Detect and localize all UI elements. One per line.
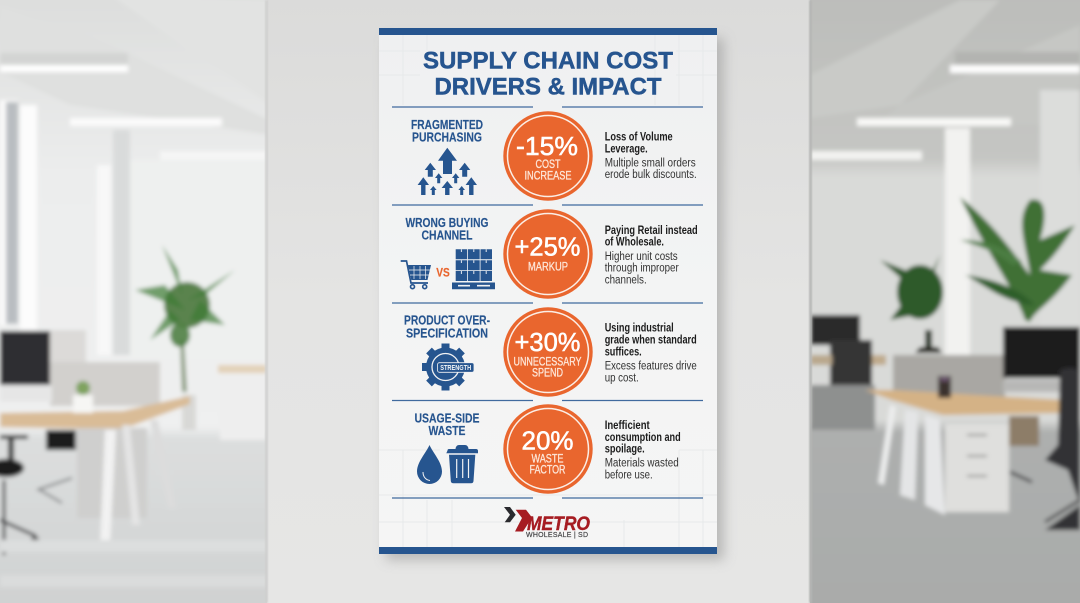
stat circle: COST bbox=[536, 159, 560, 171]
description: before use. bbox=[605, 469, 653, 481]
heading bbox=[406, 215, 488, 243]
description: up cost. bbox=[605, 373, 639, 385]
description: Loss of Volume bbox=[605, 132, 673, 144]
row 2: wrong buying channel bbox=[401, 209, 698, 299]
heading bbox=[411, 117, 483, 144]
background: blurred office left side bbox=[0, 0, 270, 603]
description: Using industrial bbox=[605, 323, 674, 335]
poster bbox=[379, 28, 717, 554]
description: Excess features drive bbox=[605, 361, 697, 373]
heading: USAGE-SIDE bbox=[414, 410, 480, 425]
stat circle bbox=[503, 111, 593, 201]
description: channels. bbox=[605, 274, 647, 286]
heading: PRODUCT OVER- bbox=[404, 313, 490, 328]
background: blurred office right side bbox=[808, 0, 1080, 603]
stat circle: +30% bbox=[514, 327, 580, 357]
icon: pallet of boxes bbox=[452, 249, 495, 289]
logo: metro wholesale: METRO bbox=[527, 514, 590, 535]
heading bbox=[404, 313, 490, 340]
stat circle: 20% bbox=[522, 425, 574, 455]
icon: shopping cart bbox=[401, 261, 431, 289]
heading: CHANNEL bbox=[422, 228, 473, 243]
stat circle: UNNECESSARY bbox=[514, 357, 582, 369]
description: through improper bbox=[605, 263, 679, 275]
heading: WRONG BUYING bbox=[406, 215, 488, 230]
stat circle: SPEND bbox=[532, 367, 563, 379]
description: Higher unit costs bbox=[605, 251, 678, 263]
stat circle: INCREASE bbox=[524, 170, 572, 182]
description: of Wholesale. bbox=[605, 237, 664, 249]
bottom bar bbox=[379, 547, 717, 554]
heading: WASTE bbox=[428, 423, 466, 438]
title: DRIVERS & IMPACT bbox=[434, 74, 662, 100]
poster shadow bbox=[386, 38, 724, 560]
heading: SPECIFICATION bbox=[406, 325, 488, 340]
heading: PURCHASING bbox=[412, 129, 482, 144]
description: Multiple small orders bbox=[605, 158, 696, 170]
stat circle bbox=[503, 404, 593, 494]
row 1: fragmented purchasing bbox=[411, 111, 697, 201]
title: SUPPLY CHAIN COST bbox=[423, 48, 673, 74]
icon: scattered arrows bbox=[418, 148, 477, 195]
description bbox=[605, 225, 698, 286]
top bar bbox=[379, 28, 717, 35]
description: erode bulk discounts. bbox=[605, 169, 697, 181]
description: Leverage. bbox=[605, 144, 648, 156]
stat circle: FACTOR bbox=[530, 465, 566, 477]
vs label: VS bbox=[436, 265, 450, 279]
description: suffices. bbox=[605, 346, 642, 358]
stat circle: MARKUP bbox=[528, 261, 568, 273]
description: grade when standard bbox=[605, 335, 697, 347]
description bbox=[605, 323, 697, 385]
icon: trash bin bbox=[446, 445, 478, 483]
description: consumption and bbox=[605, 432, 681, 444]
stat circle: +25% bbox=[514, 232, 580, 262]
wall panel behind poster bbox=[265, 0, 812, 603]
description: Materials wasted bbox=[605, 457, 679, 469]
stat circle: -15% bbox=[516, 131, 578, 161]
icon: gear with strength label bbox=[422, 344, 474, 390]
description: spoilage. bbox=[605, 443, 645, 455]
stat circle bbox=[503, 209, 593, 299]
icon: chevrons bbox=[504, 507, 532, 532]
row 3: product over-specification bbox=[404, 307, 697, 397]
description bbox=[605, 132, 697, 181]
heading: FRAGMENTED bbox=[411, 117, 483, 132]
heading bbox=[414, 410, 480, 438]
icon: water drop bbox=[417, 445, 442, 484]
row 4: usage-side waste bbox=[414, 404, 681, 494]
logo: metro wholesale bbox=[504, 507, 590, 539]
logo: metro wholesale: WHOLESALE | SD bbox=[526, 532, 588, 539]
stat circle: WASTE bbox=[532, 454, 564, 466]
description bbox=[605, 420, 681, 481]
title bbox=[423, 48, 673, 100]
stat circle bbox=[503, 307, 593, 397]
icon: gear with strength label: STRENGTH bbox=[440, 363, 471, 372]
description: Paying Retail instead bbox=[605, 225, 698, 237]
description: Inefficient bbox=[605, 420, 650, 432]
poster paper bbox=[379, 28, 717, 554]
